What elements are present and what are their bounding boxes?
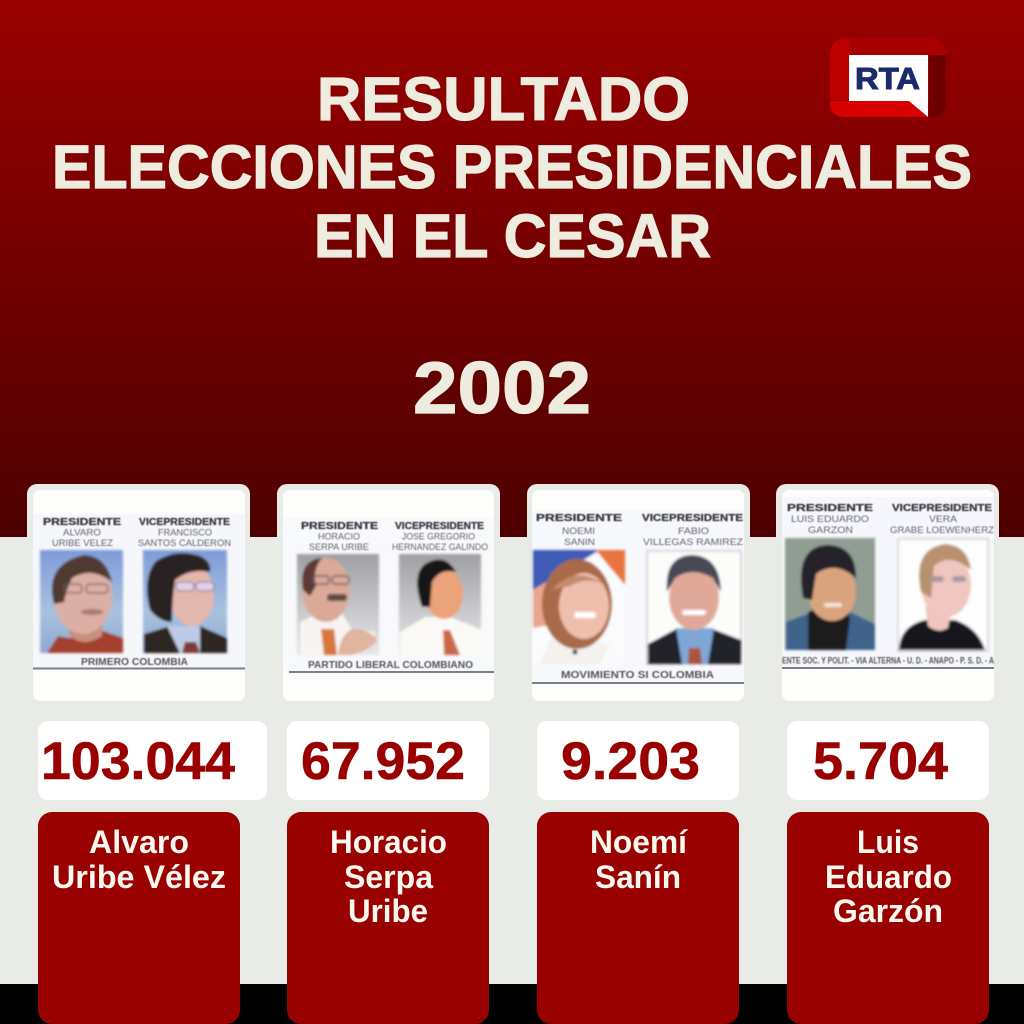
name card: Horacio Serpa Uribe: Uribe (348, 893, 428, 929)
portrait: Luis Eduardo Garzon (785, 538, 875, 650)
name card: Luis Eduardo Garzon: Luis (857, 824, 919, 860)
name card: Alvaro Uribe Velez: Alvaro (89, 824, 189, 860)
background: black footer band (0, 984, 1024, 1024)
ballot labels: URIBE VELEZ (52, 538, 113, 549)
ballot labels: HORACIO (318, 532, 360, 542)
name card: Alvaro Uribe Velez (38, 812, 240, 1024)
ballot labels: NOEMI (562, 526, 595, 537)
ballot labels: VERA (929, 514, 958, 525)
title: ELECCIONES PRESIDENCIALES (52, 133, 972, 201)
ballot labels: SERPA URIBE (309, 542, 369, 553)
ballot labels: MOVIMIENTO SI COLOMBIA (561, 670, 714, 681)
ballot labels: VICEPRESIDENTE (642, 513, 743, 524)
panel: ballot Garzon (776, 484, 999, 708)
name card: Noemi Sanin (537, 812, 739, 1024)
background: red gradient header (0, 0, 1024, 537)
ballot labels: SANTOS CALDERON (138, 538, 231, 549)
name card: Noemi Sanin: Sanín (595, 859, 681, 895)
panel: ballot Uribe (27, 484, 250, 708)
vote count: Sanin (537, 721, 739, 800)
ballot labels: PRESIDENTE (301, 521, 378, 532)
ballot labels: PRESIDENTE (787, 503, 873, 514)
ballot labels: HERNANDEZ GALINDO (392, 542, 488, 553)
icon: RTA logo: RTA (855, 61, 920, 96)
ballot labels (301, 521, 488, 671)
ballot labels (536, 513, 743, 681)
name card: Noemi Sanin: Noemí (590, 824, 688, 860)
name card: Horacio Serpa Uribe: Serpa (344, 859, 433, 895)
year: 2002 (413, 348, 591, 429)
portrait: Francisco Santos (143, 550, 227, 653)
ballot labels: GRABE LOEWENHERZ (890, 525, 994, 536)
vote count: Uribe (38, 721, 267, 800)
portrait: Vera Grabe (898, 539, 988, 651)
ballot labels: JOSE GREGORIO (402, 532, 475, 542)
name card: Alvaro Uribe Velez: Uribe Vélez (52, 859, 226, 895)
panel: ballot Sanin (527, 484, 750, 708)
name card: Horacio Serpa Uribe: Horacio (330, 824, 447, 860)
ballot labels: VICEPRESIDENTE (139, 517, 230, 528)
name card: Luis Eduardo Garzon: Garzón (833, 893, 943, 929)
ballot labels: PARTIDO LIBERAL COLOMBIANO (308, 660, 473, 671)
name card: Horacio Serpa Uribe (287, 812, 489, 1024)
ballot labels: VICEPRESIDENTE (395, 521, 484, 532)
ballot labels: SANIN (564, 537, 595, 548)
ballot labels: GARZON (808, 525, 853, 536)
ballot labels (43, 517, 231, 668)
ballot labels: ALVARO (63, 528, 101, 538)
ballot labels: FABIO (678, 526, 709, 537)
ballot labels: FRANCISCO (158, 528, 212, 538)
portrait: Noemi Sanin (533, 550, 625, 664)
portrait: Horacio Serpa (297, 554, 379, 655)
vote count: Garzon: 5.704 (813, 732, 949, 791)
name card: Luis Eduardo Garzon: Eduardo (825, 859, 952, 895)
ballot labels: PRESIDENTE (43, 517, 121, 528)
portrait: Fabio Villegas (647, 551, 741, 664)
title: EN EL CESAR (314, 202, 711, 270)
vote count: Serpa (287, 721, 489, 800)
ballot labels: VILLEGAS RAMIREZ (643, 537, 743, 548)
ballot labels: VICEPRESIDENTE (892, 503, 992, 514)
panel: ballot Serpa (277, 484, 500, 708)
title: RESULTADO (317, 65, 690, 133)
ballot labels (782, 503, 994, 666)
vote count: Sanin: 9.203 (561, 732, 700, 791)
vote count: Serpa: 67.952 (301, 732, 465, 791)
name card: Luis Eduardo Garzon (787, 812, 989, 1024)
ballot labels: LUIS EDUARDO (791, 514, 869, 525)
icon: RTA logo (830, 38, 946, 117)
portrait: Jose Gregorio Hernandez (399, 554, 482, 655)
vote count: Uribe: 103.044 (41, 732, 236, 791)
portrait: Alvaro Uribe (40, 550, 123, 653)
ballot labels: PRESIDENTE (536, 513, 622, 524)
ballot labels: PRIMERO COLOMBIA (81, 657, 188, 668)
title (52, 65, 972, 270)
vote count: Garzon (787, 721, 989, 800)
background: light body (0, 537, 1024, 984)
